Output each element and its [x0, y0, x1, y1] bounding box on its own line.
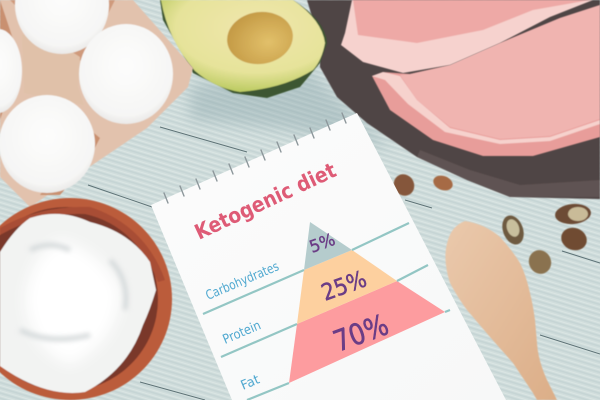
terracotta bowl with coconut oil — [0, 198, 172, 400]
avocado half — [160, 0, 327, 98]
raw meat: upper chop — [341, 0, 593, 73]
slate board — [307, 0, 600, 199]
egg: top — [15, 0, 109, 54]
egg: right — [79, 24, 173, 124]
value: 70%: 70% — [329, 307, 393, 359]
wooden spoon — [445, 221, 557, 400]
egg: front — [0, 95, 95, 193]
diet pyramid: protein layer — [297, 250, 397, 324]
egg: left — [0, 29, 22, 113]
label: protein: Protein — [221, 318, 263, 348]
spiral binding — [164, 113, 346, 203]
diet pyramid: carbohydrates layer — [304, 222, 352, 270]
divider lines — [203, 223, 450, 400]
diet pyramid: fat layer — [289, 281, 445, 383]
avocado pit hollow — [224, 8, 296, 68]
value: 5%: 5% — [307, 230, 338, 258]
notebook page — [151, 113, 506, 400]
egg carton with eggs — [0, 0, 193, 207]
label: carbohydrates: Carbohydrates — [204, 259, 282, 304]
title: Ketogenic diet — [191, 158, 340, 245]
label: fat: Fat — [239, 372, 262, 394]
nuts — [390, 170, 592, 278]
coconut oil — [0, 214, 156, 393]
value: 25%: 25% — [318, 266, 370, 307]
raw meat: lower chop — [372, 5, 600, 156]
carton cone — [22, 33, 84, 105]
